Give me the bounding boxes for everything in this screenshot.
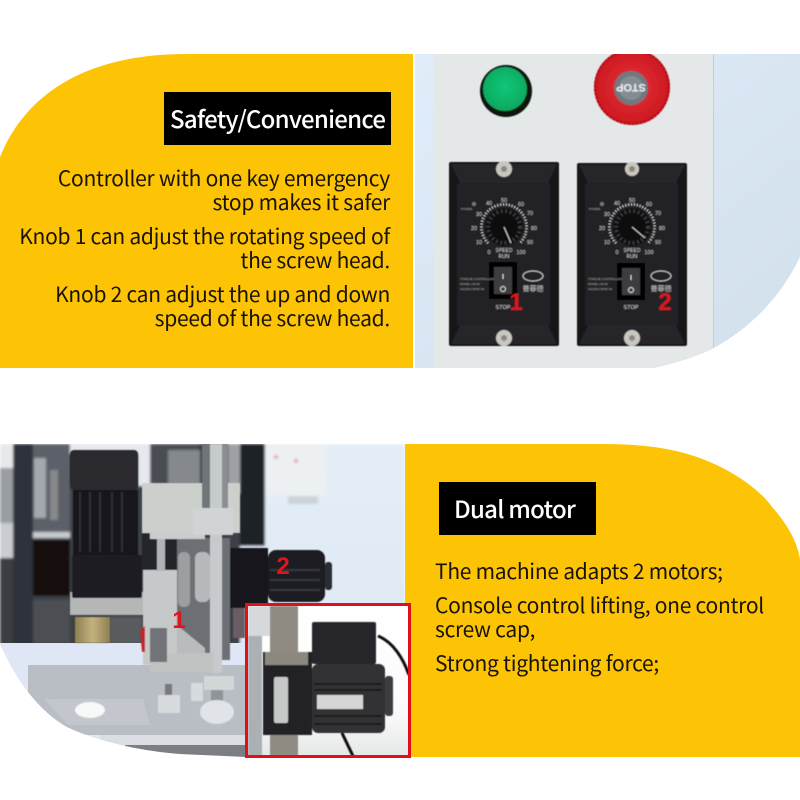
speed controller 1: 普菲德 — [522, 284, 544, 294]
blurred lab background — [0, 444, 405, 664]
motor 2 — [230, 548, 332, 638]
speed controller 2: RUN — [627, 254, 638, 260]
panel: dual motor — [405, 444, 800, 757]
speed controller 2: 60 — [646, 202, 652, 208]
speed controller 2: 90 — [655, 240, 661, 246]
speed controller 1: SPEED — [496, 248, 513, 254]
yellow text panel — [405, 444, 800, 757]
speed controller 2: SPEED — [624, 248, 641, 254]
panel: safety and convenience — [0, 54, 413, 368]
label: number 2 on motor: 2 — [276, 553, 290, 580]
heading: Safety/Convenience — [164, 92, 391, 145]
label: number 1: 1 — [509, 289, 523, 316]
speed controller 2: 100 — [644, 250, 654, 256]
speed controller 1: RUN — [499, 254, 510, 260]
speed controller 1: 40 — [486, 201, 492, 207]
speed controller 1 — [449, 161, 559, 346]
speed controller 2: POWER — [589, 207, 601, 211]
speed controller 1: 80 — [531, 226, 537, 232]
text: knob 2: speed of the screw head. — [155, 303, 390, 333]
text: tightening force: Strong tightening force; — [435, 648, 659, 678]
heading: Dual motor — [439, 482, 596, 535]
speed controller 1: 90 — [527, 240, 533, 246]
machine frame and screw column — [140, 444, 240, 724]
speed controller 2: 普菲德 — [650, 284, 672, 294]
text: knob 1: Knob 1 can adjust the rotating speed of — [19, 221, 391, 251]
speed controller 2: STOP — [624, 305, 639, 311]
white bottle cap — [75, 702, 105, 718]
text: console control: screw cap, — [435, 614, 535, 644]
speed controller 1: MODEL US-52 — [460, 282, 480, 286]
speed controller 1: 60 — [518, 202, 524, 208]
photo: control panel — [415, 49, 800, 368]
speed controller 1: 50 — [501, 198, 507, 204]
speed controller 2: 70 — [655, 211, 661, 217]
table top — [0, 643, 245, 746]
text: emergency stop: Controller with one key emergency — [58, 163, 390, 193]
speed controller 1: STOP — [496, 305, 511, 311]
heading: Safety/Convenience: Safety/Convenience — [170, 100, 385, 135]
speed controller 1: 100 — [516, 250, 526, 256]
speed controller 1: 1A/220V 50/60 Hz — [460, 287, 485, 291]
speed controller 2 — [577, 162, 687, 346]
text: emergency stop: stop makes it safer — [212, 187, 391, 217]
yellow text panel — [0, 54, 413, 368]
speed controller 2: 1A/220V 50/60 Hz — [588, 287, 613, 291]
icon: red emergency stop button — [594, 49, 670, 125]
speed controller 1: POWER — [461, 207, 473, 211]
speed controller 1: 30 — [476, 212, 482, 218]
speed controller 1: 10 — [476, 240, 482, 246]
text: knob 2: Knob 2 can adjust the up and down — [55, 279, 390, 309]
speed controller 2: 50 — [629, 198, 635, 204]
speed controller 1: 0 — [487, 250, 491, 256]
photo: dual motor machine — [0, 444, 405, 757]
speed controller 1: TORQUE CONTROLLER — [460, 277, 495, 281]
speed controller 2: 10 — [604, 240, 610, 246]
label: number 1 on motor: 1 — [172, 607, 186, 634]
speed controller 1: 70 — [527, 211, 533, 217]
speed controller 2: 0 — [615, 250, 619, 256]
speed controller 2: MODEL US-52 — [588, 282, 608, 286]
text: console control: Console control lifting, one control — [435, 590, 764, 620]
motor 1 — [70, 450, 147, 643]
speed controller 2: TORQUE CONTROLLER — [588, 277, 623, 281]
speed controller 2: 30 — [604, 212, 610, 218]
text: motors: The machine adapts 2 motors; — [435, 556, 723, 586]
text: knob 1: the screw head. — [240, 245, 390, 275]
inset: close-up of motor — [246, 604, 410, 756]
speed controller 2: 40 — [614, 201, 620, 207]
speed controller 1: 20 — [471, 226, 477, 232]
heading: Dual motor: Dual motor — [454, 490, 576, 525]
speed controller 2: 80 — [659, 226, 665, 232]
label: number 2: 2 — [658, 289, 672, 316]
speed controller 2: 20 — [599, 226, 605, 232]
icon: red emergency stop button: STOP — [616, 81, 646, 93]
icon: green power light — [480, 65, 532, 117]
